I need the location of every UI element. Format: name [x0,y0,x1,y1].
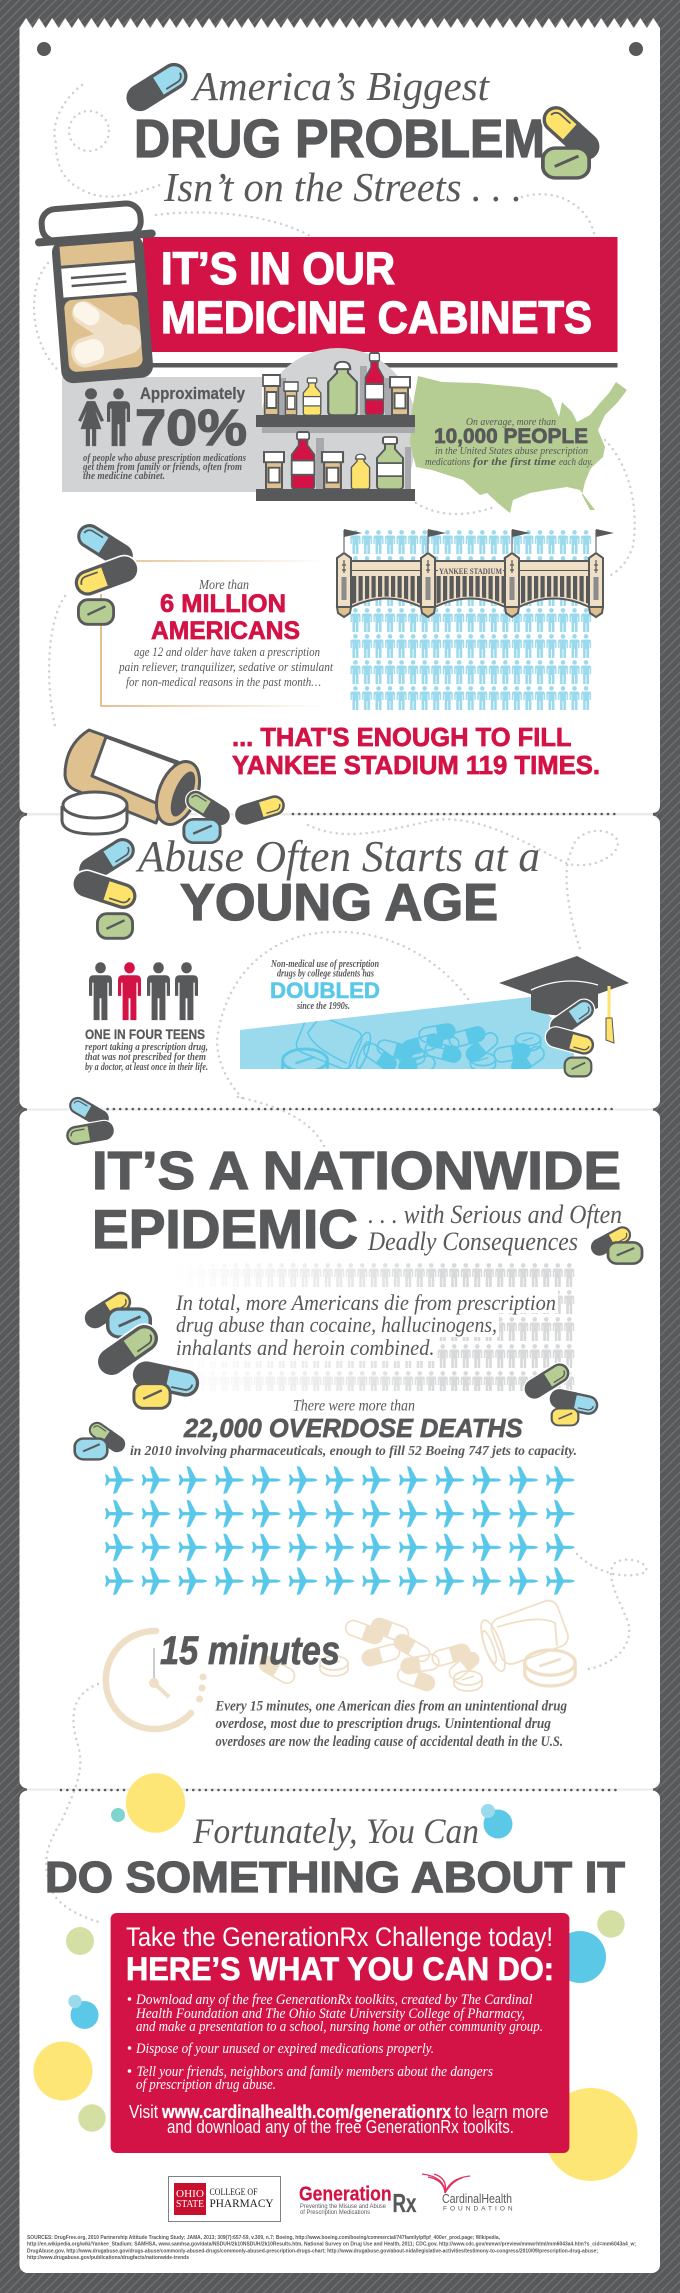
chart: blue people grid [350,530,592,712]
text: 6 million Americans: AMERICANS [151,617,300,645]
text: doubled [270,959,380,1012]
text: every 15 minutes paragraph: Every 15 minutes, one American dies from an unintentional drug [215,1698,567,1714]
icon: woman and man [78,388,130,446]
text: one in four teens [85,1026,208,1073]
subheading: serious and deadly consequences: . . . with Serious and Often [368,1200,622,1229]
text: 6 million Americans: age 12 and older have taken a prescription [134,644,320,659]
panel: red call to action: HERE’S WHAT YOU CAN DO: [126,1951,554,1987]
panel: red call to action [111,1913,569,2153]
logo: Ohio State College of Pharmacy: PHARMACY [210,2196,274,2210]
logo: Generation Rx: Rx [392,2188,417,2218]
text: sources: SOURCES: DrugFree.org, 2010 Partnership Attitude Tracking Study; JAMA, 2013; 309(7):657-59, v.309, n.7; Boeing, http://www.boeing.com/boeing/commercial/747family/pf/pf_400er_prod.page; Wikipedia, [27,2235,501,2241]
text: 6 million Americans: for non-medical reasons in the past month… [126,674,321,689]
decorative coloured circles [34,1773,638,2181]
text: doubled: DOUBLED [270,978,380,1003]
icon: tipped pill bottle with tablet and pills [62,730,289,843]
panel: red call to action: Dispose of your unused or expired medications properly. [135,2041,434,2057]
text: one in four teens: by a doctor, at least once in their life. [85,1062,208,1073]
icon: left pill cluster [79,1286,204,1408]
icon: right pill cluster [519,1358,602,1425]
text: sources: DrugAbuse.gov, http://www.drugabuse.gov/drugs-abuse/commonly-abused-drugs/commonly-abused-prescription-drugs-chart; http://www.drugabuse.gov/about-nida/legislative-activities/testimony-to-congress/2010/09/prescription-drug-abuse; [27,2248,598,2254]
icon: blue capsule top left [119,55,195,119]
heading: America's Biggest: America’s Biggest [190,63,491,109]
panel: red call to action: Visit [129,2102,158,2122]
text: sources: http://en.wikipedia.org/wiki/Yankee_Stadium; SAMHSA, www.samhsa.gov/data/NSDUH/2k10NSDUH/2k10Results.htm, National Survey on Drug Use and Health, 2011; CDC.gov, http://www.cdc.gov/mmwr/preview/mmwrhtml/mm6043a4.htm?s_cid=mm6043a4_w; [27,2242,636,2248]
icon: capsules and tablet beside frame [69,517,143,624]
chart: fading gray people grid [233,1263,574,1391]
heading: Young Age: YOUNG AGE [180,874,498,932]
panel: gray stats background [62,348,416,492]
logo: Cardinal Health Foundation [422,2174,513,2212]
icon: capsules and tablet by title [68,831,142,938]
panel: red call to action: and make a presentation to a school, nursing home or other community group. [136,2019,543,2035]
text: one in four teens: that was not prescribed for them [85,1052,206,1063]
map: United States: medications [425,457,470,468]
map: United States: in the United States abuse prescription [435,446,588,457]
subheading: serious and deadly consequences: Deadly Consequences [367,1227,578,1256]
logo: Generation Rx: of Prescription Medications [300,2209,371,2216]
text: 6 million Americans: pain reliever, tranquilizer, sedative or stimulant [118,659,333,674]
heading: It's a nationwide epidemic: IT’S A NATIONWIDE [92,1141,621,1201]
text: more Americans die: In total, more Americans die from prescription [175,1290,556,1315]
map: United States: for the first time [473,456,556,468]
icon: capsules and tablet under cap [542,994,600,1076]
text: more Americans die [170,1290,558,1361]
panel: red call to action: Take the GenerationRx Challenge today! [126,1922,553,1952]
logo: Ohio State College of Pharmacy [168,2176,280,2222]
text: more Americans die: drug abuse than cocaine, hallucinogens, [176,1312,497,1337]
text: one in four teens: ONE IN FOUR TEENS [85,1026,205,1042]
stat: approximately 70 percent: get them from family or friends, often from [82,462,242,473]
panel: section 2 card [20,816,660,1108]
heading: It's a nationwide epidemic [92,1141,621,1260]
icon: four teens [89,962,198,1020]
panel: red call to action: of prescription drug abuse. [136,2077,276,2093]
panel: section 3 card [20,1110,660,1788]
text: 6 million Americans: 6 MILLION [160,590,286,618]
heading: Abuse Often Starts at a: Abuse Often Starts at a [135,832,540,881]
text: every 15 minutes paragraph [215,1698,567,1750]
heading: Drug Problem: DRUG PROBLEM [134,109,545,169]
illustration: Yankee Stadium [337,529,614,617]
logo: Generation Rx [299,2184,417,2218]
logo: Ohio State College of Pharmacy: STATE [176,2199,204,2210]
logo: Ohio State College of Pharmacy: COLLEGE OF [210,2187,258,2197]
text: doubled: drugs by college students has [277,968,374,980]
map: United States: 10,000 PEOPLE [434,425,588,448]
panel: red call to action: Download any of the free GenerationRx toolkits, created by The Cardinal [135,1992,532,2008]
stat: approximately 70 percent: 70% [135,399,247,456]
text: 22,000 overdose deaths: in 2010 involving pharmaceuticals, enough to fill 52 Boeing 747 jets to capacity. [130,1444,577,1459]
stat: approximately 70 percent [82,384,247,482]
logo: Cardinal Health Foundation: FOUNDATION [443,2206,513,2212]
illustration: Yankee Stadium: YANKEE STADIUM [439,566,502,576]
text: more Americans die: inhalants and heroin combined. [176,1335,434,1360]
logo: Generation Rx: Generation [299,2184,392,2206]
heading: It's a nationwide epidemic: EPIDEMIC [92,1198,358,1260]
text: doubled: since the 1990s. [296,1001,350,1012]
stat: approximately 70 percent: Approximately [140,384,245,403]
panel: section 1 card [20,18,660,813]
text: enough to fill Yankee Stadium: YANKEE STADIUM 119 TIMES. [232,750,600,780]
text: enough to fill Yankee Stadium [232,722,600,780]
icon: large pill bottle [35,200,156,384]
text: every 15 minutes paragraph: overdose, most due to prescription drugs. Unintentional drug [216,1716,551,1732]
panel: red call to action: Health Foundation and The Ohio State University College of Pharmacy, [135,2006,525,2022]
panel: red call to action: and download any of the free GenerationRx toolkits. [167,2117,514,2137]
panel: red call to action: Tell your friends, neighbors and family members about the dangers [137,2064,493,2080]
map: United States: On average, more than [466,416,556,428]
text: 22,000 overdose deaths [130,1398,577,1459]
text: sources: http://www.drugabuse.gov/publications/drugfacts/nationwide-trends [27,2255,189,2261]
heading: Fortunately, You Can: Fortunately, You Can [192,1811,479,1851]
heading: Do something about it: DO SOMETHING ABOUT IT [45,1853,625,1902]
text: 22,000 overdose deaths: There were more than [293,1398,415,1414]
logo: Ohio State College of Pharmacy: OHIO [176,2189,204,2200]
text: doubled: Non-medical use of prescription [270,959,379,970]
icon: yellow capsule and green tablet [535,98,607,178]
panel: red call to action: to learn more [454,2102,548,2122]
panel: 6 million Americans frame [100,560,325,707]
chart: 52 jet planes [105,1466,583,1601]
banner: red medicine cabinets [143,237,618,352]
map: United States [410,376,627,513]
illustration: faded bottle and pills [257,1595,575,1693]
icon: green capsule and blue tablet [75,1417,130,1459]
text: every 15 minutes paragraph: overdoses are now the leading cause of accidental death in the U.S. [216,1734,563,1750]
text: enough to fill Yankee Stadium: ... THAT'S ENOUGH TO FILL [232,722,572,752]
text: 6 million Americans: More than [198,578,249,593]
banner: red medicine cabinets: IT’S IN OUR [161,243,395,294]
stat: approximately 70 percent: of people who abuse prescription medications [83,453,246,464]
icon: graduation cap [499,956,629,1043]
shelves with medicine bottles [256,353,415,501]
map: United States: each day. [559,457,593,468]
text: 15 minutes: 15 minutes [160,1629,340,1673]
icon: clock [106,1631,206,1729]
text: one in four teens: report taking a prescription drug, [85,1042,208,1053]
text: 6 million Americans [118,578,333,689]
stat: approximately 70 percent: the medicine cabinet. [83,471,165,482]
text: 22,000 overdose deaths: 22,000 OVERDOSE DEATHS [183,1413,523,1443]
heading: Isn't on the Streets: Isn’t on the Streets . . . [163,164,522,210]
logo: Cardinal Health Foundation: CardinalHealth [442,2191,512,2206]
icon: capsules at section 3 top [63,1092,117,1148]
subheading: serious and deadly consequences [367,1200,622,1256]
icon: yellow capsule and green tablet [586,1222,642,1264]
logo: Generation Rx: Preventing the Misuse and Abuse [300,2203,386,2210]
panel: red call to action: www.cardinalhealth.com/generationrx [161,2102,451,2122]
chart: blue wedge with spilled pills [240,997,574,1069]
panel: section 4 card [20,1790,660,2273]
banner: red medicine cabinets: MEDICINE CABINETS [161,292,592,343]
text: sources [27,2235,636,2261]
